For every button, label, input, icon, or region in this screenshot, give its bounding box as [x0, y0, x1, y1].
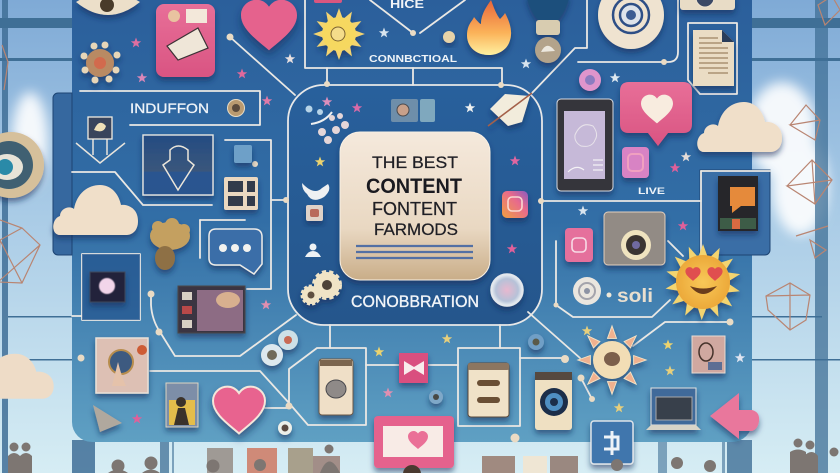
icon: lilac ring	[579, 69, 601, 91]
connector nodes	[78, 30, 734, 442]
title card	[340, 132, 490, 280]
icon: pink b tile	[565, 228, 593, 262]
icon: phone	[319, 359, 353, 415]
icon: tablet	[557, 99, 613, 191]
icon: right cloud	[697, 102, 782, 152]
soli logo	[573, 277, 653, 307]
soli logo: soli	[617, 286, 653, 307]
left lens	[0, 132, 44, 198]
card stripes	[356, 246, 473, 258]
title line 2: CONTENT	[366, 175, 462, 198]
icon: flower badge	[80, 42, 120, 84]
panel: sparkle image	[82, 254, 140, 320]
icon: phone with spiral	[535, 372, 572, 430]
left cloud on sky	[0, 354, 54, 399]
icon: person	[305, 244, 321, 257]
icon: cluster of dots	[306, 96, 349, 144]
picture: portrait	[692, 336, 725, 373]
icon: left cloud	[53, 185, 138, 235]
icon: eye	[76, 0, 140, 15]
small pink tab	[314, 0, 342, 3]
icon: pink mail tile	[156, 4, 215, 77]
collaboration label: CONOBBRATION	[351, 292, 479, 311]
icon: crystal ball	[491, 274, 523, 306]
icon: top heart	[241, 0, 297, 50]
icon: cream menu card	[468, 363, 509, 417]
induction label: INDUFFON	[130, 100, 209, 116]
audience silhouettes and photos	[8, 438, 838, 473]
icon: camera	[604, 212, 665, 265]
icon: pink arrow	[710, 393, 759, 439]
icon: lilac square	[622, 147, 649, 178]
icon: brain	[150, 218, 190, 270]
picture: poster	[166, 383, 198, 427]
icon: small square	[306, 205, 323, 221]
icon: flowers	[302, 272, 340, 304]
icon: bottom heart	[213, 387, 265, 433]
icon: heart speech bubble	[620, 82, 692, 146]
live label: LIVE	[638, 186, 665, 197]
icon: navy panel with diamond	[143, 135, 213, 195]
title line 3: FONTENT	[372, 199, 457, 219]
icon: grid tile	[224, 177, 258, 210]
connectional label: CONNBCTIOAL	[369, 54, 457, 65]
icon: document	[693, 30, 734, 86]
icon: bird	[302, 183, 329, 200]
icon: instagram tile	[502, 191, 528, 218]
icon: flame	[467, 0, 511, 55]
icon: sun badge	[313, 8, 365, 60]
icon: orange chat poster	[718, 176, 758, 231]
icon: pink bowtie tile	[399, 353, 428, 383]
icon: laptop	[646, 388, 701, 430]
icon: light bulb	[526, 0, 570, 63]
small coin	[443, 31, 455, 43]
title line 1: THE BEST	[372, 153, 458, 172]
icon: pink heart box	[374, 416, 454, 468]
icon: settings tiles	[391, 99, 435, 122]
icon: small app tile	[234, 145, 252, 163]
icon: top camera	[680, 0, 735, 10]
icon: paper plane with arrow	[488, 93, 532, 126]
icon: sun emoji with heart eyes	[665, 244, 741, 320]
central rounded panel	[288, 85, 542, 325]
decorative stars	[131, 28, 745, 423]
picture: framed collage	[96, 338, 148, 393]
connector lines	[72, 0, 770, 426]
icon: blue square badge	[591, 421, 633, 464]
icon: grey wedge	[93, 405, 122, 432]
small eye beads	[261, 330, 544, 435]
icon: coin	[228, 100, 244, 116]
title line 4: FARMODS	[374, 220, 458, 239]
icon: starburst	[578, 326, 646, 394]
icon: chat bubble	[209, 229, 262, 274]
wire shapes	[0, 0, 840, 330]
icon: target disc	[598, 0, 664, 49]
picture: dark photo	[178, 286, 245, 333]
icon: down arrow	[76, 117, 125, 163]
main blue board	[53, 0, 770, 442]
